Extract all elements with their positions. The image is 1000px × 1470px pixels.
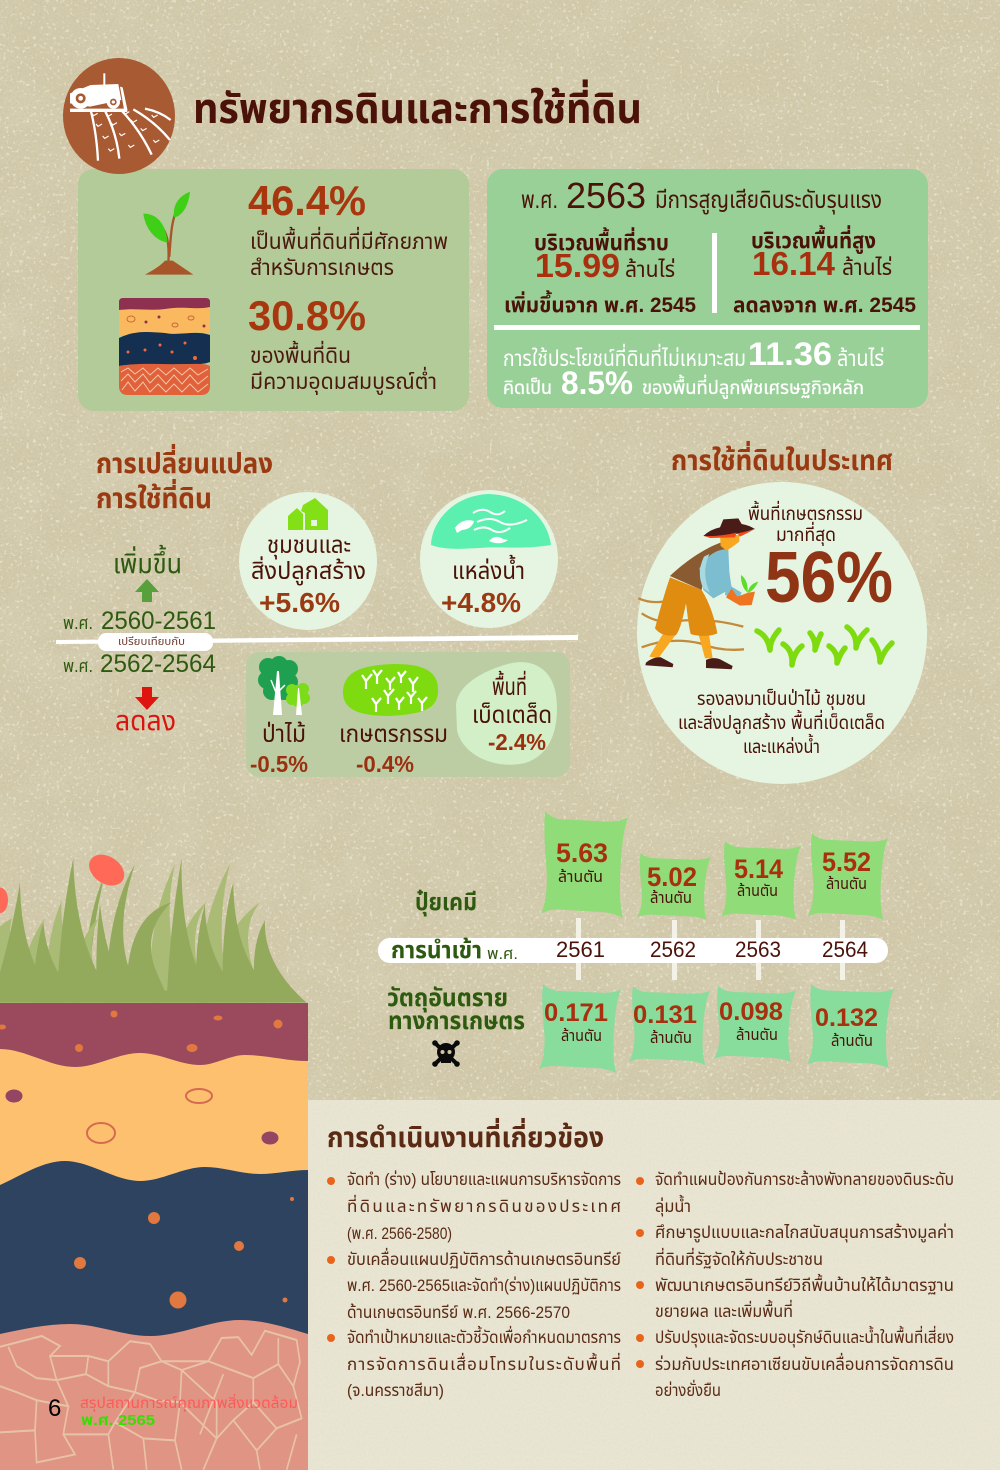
stat: lowland: [504, 227, 696, 317]
text: runner-up uses: [678, 687, 885, 758]
timeline bar: import years: พ.ศ.: [487, 946, 518, 963]
text: most agriculture: [748, 500, 863, 546]
text: right column: ลุ่มน้ำ: [655, 1194, 691, 1217]
page number: 6: [48, 1395, 61, 1422]
text: runner-up uses: และสิ่งปลูกสร้าง พื้นที่เบ็ดเตล็ด: [678, 709, 885, 735]
icon: houses: [288, 498, 328, 530]
bag: fertilizer 2562: [637, 853, 711, 920]
text: left column: ด้านเกษตรอินทรีย์ พ.ศ. 2566-2570: [347, 1302, 570, 1322]
circle: water bodies +4.8%: [420, 490, 558, 628]
panel: decreasing land uses: -0.4%: [356, 751, 414, 777]
bag: hazardous 2564: ล้านตัน: [831, 1033, 873, 1050]
bag: fertilizer 2561: ล้านตัน: [558, 869, 603, 886]
text: unsuitable land use: [503, 336, 884, 401]
timeline bar: import years: 2562: [650, 937, 696, 962]
stat: highland: 16.14: [752, 245, 836, 282]
circle: water bodies +4.8%: +4.8%: [441, 587, 521, 618]
bag: fertilizer 2564: ล้านตัน: [826, 876, 867, 893]
footer: report title: [80, 1393, 298, 1429]
panel: decreasing land uses: -0.5%: [250, 751, 308, 777]
timeline stems: [576, 918, 845, 980]
footer: report title: พ.ศ. 2565: [81, 1412, 155, 1429]
label: hazardous substances: [387, 984, 525, 1035]
layer: navy: [0, 1150, 308, 1336]
layer: maroon topsoil: [0, 1003, 308, 1067]
label: decrease with arrow: ลดลง: [115, 705, 176, 736]
bag: fertilizer 2563: ล้านตัน: [737, 883, 778, 900]
blob: miscellaneous area: พื้นที่: [492, 670, 527, 701]
stat: lowland: เพิ่มขึ้นจาก พ.ศ. 2545: [504, 290, 696, 317]
heading: land use change: การเปลี่ยนแปลง: [96, 443, 273, 479]
text: left column: ขับเคลื่อนแผนปฏิบัติการด้านเกษตรอินทรีย์: [347, 1247, 621, 1269]
label: hazardous substances: ทางการเกษตร: [388, 1007, 525, 1035]
bullets: left column: [327, 1177, 335, 1342]
bag: hazardous 2562: 0.131: [633, 1001, 697, 1029]
panel: related operations: [308, 1100, 1000, 1470]
blob: miscellaneous area: เบ็ดเตล็ด: [472, 701, 552, 729]
bag: fertilizer 2563: 5.14: [734, 854, 783, 884]
divider with compare pill: [56, 633, 578, 651]
text: low fertility: มีความอุดมสมบูรณ์ต่ำ: [250, 366, 437, 395]
icon: lake with fish: [431, 494, 551, 549]
text: right column: ที่ดินที่รัฐจัดให้กับประชาชน: [655, 1247, 823, 1269]
label: years 2560-2561: 2560-2561: [101, 607, 216, 635]
bag: fertilizer 2561: 5.63: [556, 838, 608, 868]
text: right column: ปรับปรุงและจัดระบบอนุรักษ์ดินและน้ำในพื้นที่เสี่ยง: [655, 1325, 954, 1348]
label: chemical fertilizer: ปุ๋ยเคมี: [415, 889, 477, 917]
text: unsuitable land use: 11.36: [748, 336, 832, 372]
bag: fertilizer 2562: 5.02: [647, 862, 697, 892]
heading: land use change: [96, 443, 273, 514]
stat: lowland: บริเวณพื้นที่ราบ: [534, 227, 669, 255]
bag: hazardous 2563: ล้านตัน: [736, 1027, 778, 1044]
panel: land potential and fertility: [78, 169, 469, 411]
label: years 2562-2564: 2562-2564: [100, 650, 216, 678]
text: of soil area: ของพื้นที่ดิน: [250, 340, 351, 368]
label: years 2560-2561: พ.ศ.: [63, 613, 93, 633]
circle: national land use share: [637, 482, 927, 784]
stat: 46.4%: 46.4%: [248, 177, 366, 224]
text: left column: [347, 1170, 621, 1400]
soil particles: [0, 1010, 294, 1308]
circle: communities +5.6%: สิ่งปลูกสร้าง: [251, 555, 366, 586]
icon: seedling: [143, 192, 193, 275]
bag: hazardous 2564: 0.132: [815, 1004, 878, 1032]
heading: national land use: การใช้ที่ดินในประเทศ: [671, 440, 893, 476]
bag: hazardous 2563: [714, 986, 796, 1062]
bag: fertilizer 2564: 5.52: [822, 847, 871, 877]
text: right column: ศึกษารูปแบบและกลไกสนับสนุนการสร้างมูลค่า: [655, 1222, 954, 1244]
bag: fertilizer 2564: [808, 833, 888, 920]
text: most agriculture: มากที่สุด: [776, 521, 836, 546]
heading: soil loss: 2563: [566, 175, 646, 216]
text: right column: พัฒนาเกษตรอินทรีย์วิถีพื้นบ้านให้ได้มาตรฐาน: [655, 1273, 954, 1295]
stat: highland: บริเวณพื้นที่สูง: [751, 225, 876, 254]
blob: miscellaneous area: [456, 662, 557, 765]
label: years 2562-2564: พ.ศ.: [63, 656, 93, 676]
divider with compare pill: เปรียบเทียบกับ: [118, 636, 185, 648]
icon: trees: [258, 656, 310, 715]
panel: decreasing land uses: ป่าไม้: [262, 721, 306, 748]
timeline bar: import years: [378, 936, 888, 964]
bag: fertilizer 2561: [541, 811, 628, 918]
text: right column: จัดทำแผนป้องกันการชะล้างพังทลายของดินระดับ: [655, 1169, 954, 1189]
text: left column: การจัดการดินเสื่อมโทรมในระดับพื้นที่: [347, 1352, 621, 1374]
text: left column: ที่ดินและทรัพยากรดินของประเทศ: [347, 1194, 621, 1216]
text: unsuitable land use: ล้านไร่: [837, 346, 884, 371]
label: decrease with arrow: [115, 687, 176, 736]
stat: highland: [733, 225, 916, 317]
stat: lowland: 15.99: [535, 247, 620, 284]
text: runner-up uses: รองลงมาเป็นป่าไม้ ชุมชน: [697, 687, 866, 710]
timeline bar: import years: 2563: [735, 937, 781, 962]
text: left column: จัดทำเป้าหมายและตัวชี้วัดเพื่อกำหนดมาตรการ: [347, 1325, 621, 1347]
icon: sprouts: [757, 627, 892, 665]
layer: pink cracked subsoil: [0, 1300, 308, 1470]
text: potential farmland: เป็นพื้นที่ดินที่มีศักยภาพ: [250, 226, 448, 254]
bag: fertilizer 2562: ล้านตัน: [650, 890, 692, 907]
text: left column: (พ.ศ. 2566-2580): [347, 1224, 452, 1243]
text: left column: (จ.นครราชสีมา): [347, 1381, 444, 1400]
text: right column: อย่างยั่งยืน: [655, 1379, 721, 1400]
grass and flowers: [0, 849, 307, 1003]
text: left column: จัดทำ (ร่าง) นโยบายและแผนการบริหารจัดการ: [347, 1170, 621, 1189]
text: most agriculture: พื้นที่เกษตรกรรม: [748, 500, 863, 525]
label: hazardous substances: วัตถุอันตราย: [387, 984, 508, 1013]
icon: crop field: [343, 664, 438, 716]
stat: highland: ลดลงจาก พ.ศ. 2545: [733, 294, 916, 317]
heading: soil loss: [521, 175, 882, 216]
blob: miscellaneous area: -2.4%: [488, 729, 546, 755]
title icon: tractor ploughing field: [63, 58, 175, 174]
heading: related operations: การดำเนินงานที่เกี่ยวข้อง: [327, 1117, 604, 1153]
timeline bar: import years: 2561: [556, 937, 605, 962]
circle: communities +5.6%: [239, 492, 377, 630]
stat: highland: ล้านไร่: [842, 255, 892, 280]
text: right column: ร่วมกับประเทศอาเซียนขับเคลื่อนการจัดการดิน: [655, 1352, 954, 1374]
circle: water bodies +4.8%: แหล่งน้ำ: [452, 554, 525, 585]
bag: hazardous 2563: 0.098: [719, 998, 783, 1026]
heading: land use change: การใช้ที่ดิน: [96, 478, 212, 514]
timeline bar: import years: การนำเข้า: [391, 936, 482, 964]
bag: hazardous 2561: 0.171: [544, 999, 608, 1027]
text: unsuitable land use: 8.5%: [561, 365, 633, 401]
icon: soil layers: [119, 298, 210, 395]
text: right column: [655, 1169, 954, 1400]
label: increase with arrow: เพิ่มขึ้น: [113, 544, 182, 579]
circle: communities +5.6%: ชุมชนและ: [267, 532, 351, 560]
bag: hazardous 2561: [539, 984, 621, 1073]
text: unsuitable land use: การใช้ประโยชน์ที่ดินที่ไม่เหมาะสม: [503, 343, 746, 371]
stat: 56%: 56%: [765, 538, 893, 618]
text: runner-up uses: และแหล่งน้ำ: [743, 733, 820, 758]
footer: report title: สรุปสถานการณ์คุณภาพสิ่งแวดล้อม: [80, 1393, 298, 1412]
stat: 30.8%: 30.8%: [248, 292, 366, 339]
text: unsuitable land use: ของพื้นที่ปลูกพืชเศรษฐกิจหลัก: [642, 374, 864, 400]
title: ทรัพยากรดินและการใช้ที่ดิน: [193, 79, 642, 132]
bag: hazardous 2562: [629, 986, 710, 1065]
label: increase with arrow: [113, 544, 182, 602]
stat: lowland: ล้านไร่: [625, 257, 675, 282]
bag: fertilizer 2563: [721, 841, 801, 920]
timeline bar: import years: 2564: [822, 937, 868, 962]
text: left column: พ.ศ. 2560-2565และจัดทำ(ร่าง)แผนปฏิบัติการ: [347, 1276, 621, 1295]
heading: soil loss: พ.ศ.: [521, 187, 558, 214]
illustration: farmer planting: [638, 518, 758, 669]
panel: decreasing land uses: เกษตรกรรม: [339, 721, 448, 748]
circle: communities +5.6%: +5.6%: [259, 587, 340, 618]
bag: hazardous 2561: ล้านตัน: [561, 1028, 602, 1045]
layer: orange: [0, 1040, 308, 1185]
text: for agriculture: สำหรับการเกษตร: [250, 255, 394, 280]
panel: soil loss 2563: [487, 169, 928, 408]
icon: skull and crossbones: [432, 1040, 460, 1067]
text: right column: ขยายผล และเพิ่มพื้นที่: [655, 1299, 793, 1321]
bullets: right column: [636, 1177, 644, 1368]
heading: soil loss: มีการสูญเสียดินระดับรุนแรง: [655, 187, 882, 215]
text: unsuitable land use: คิดเป็น: [503, 377, 552, 399]
panel: decreasing land uses: [246, 652, 570, 777]
bag: hazardous 2564: [807, 984, 894, 1068]
illustration: soil profile and grass: [0, 849, 308, 1470]
bag: hazardous 2562: ล้านตัน: [650, 1030, 692, 1047]
